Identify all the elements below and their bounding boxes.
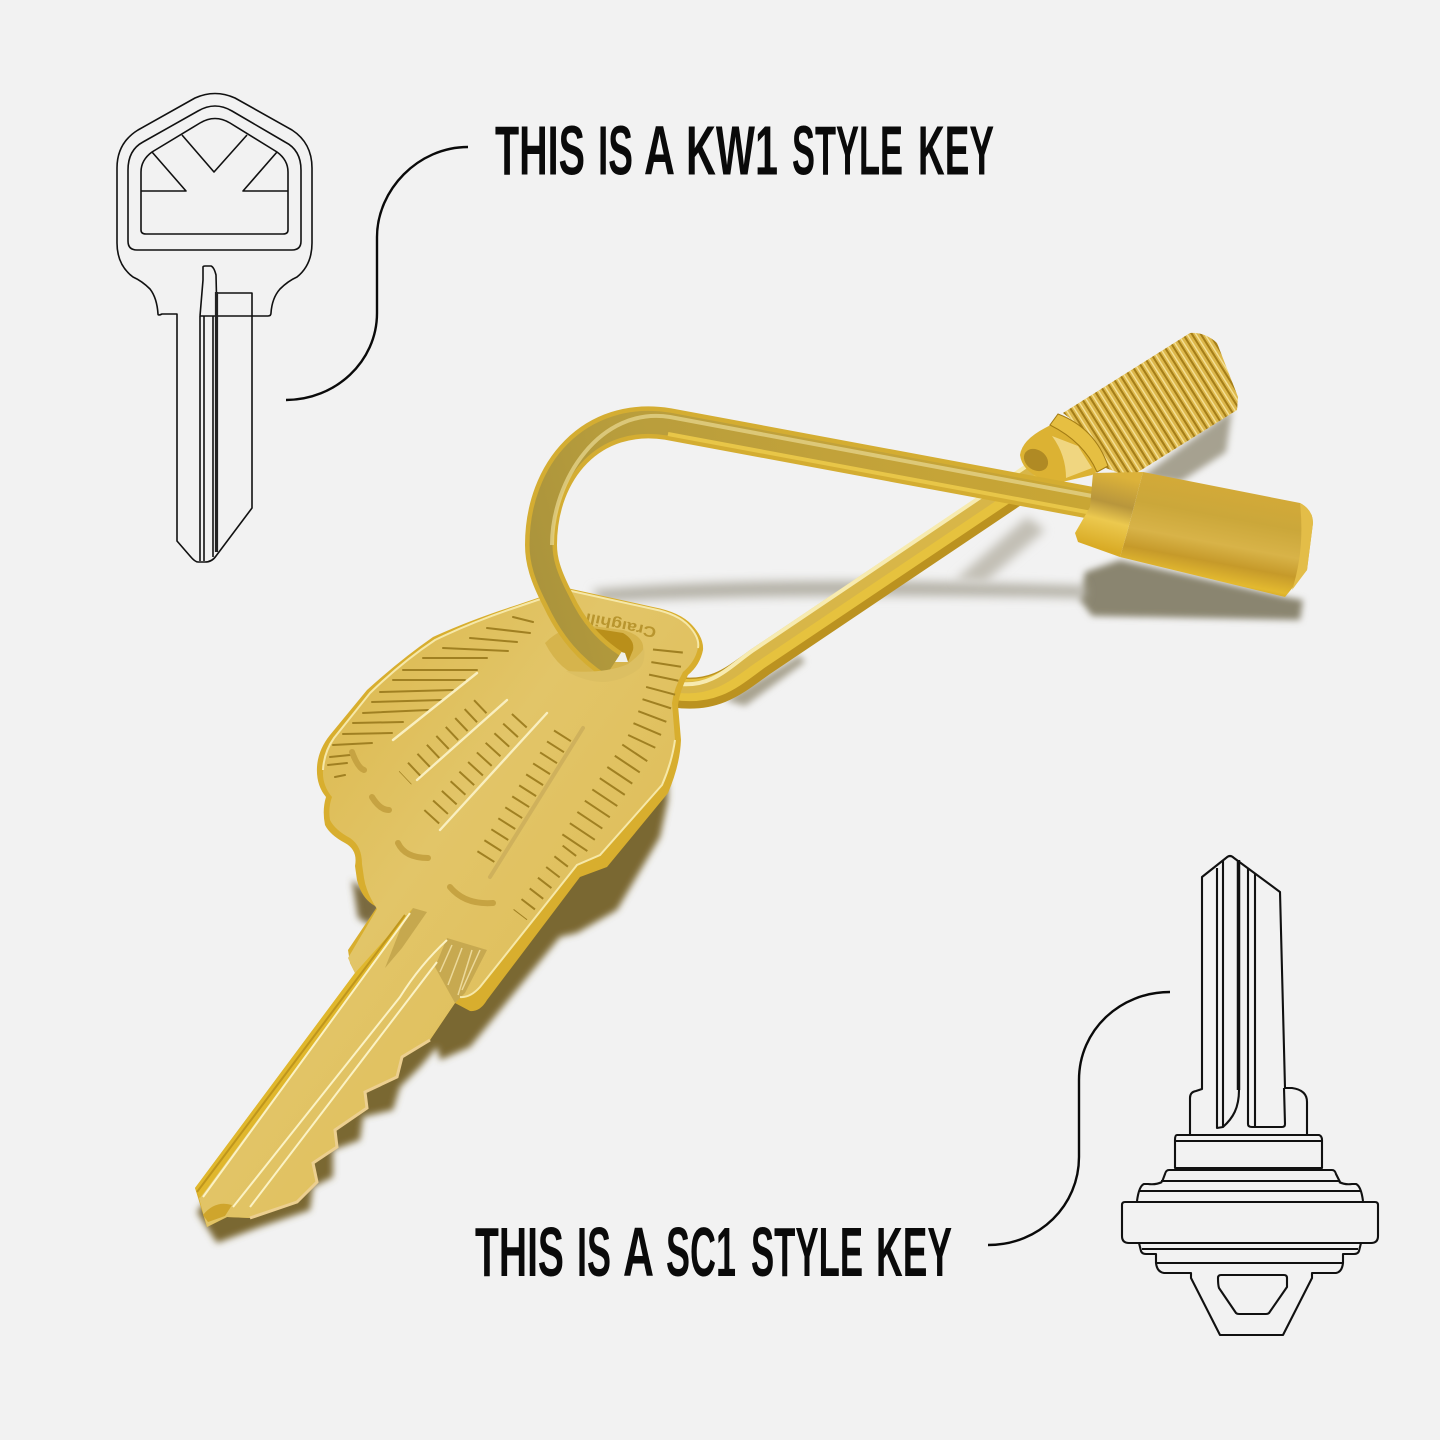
heading: SC1 label: IS [577, 1213, 611, 1291]
heading: KW1 label: STYLE [792, 112, 903, 190]
blade grooves and edges [195, 908, 487, 1222]
knurled cylinder [1063, 333, 1243, 477]
heading: SC1 label [475, 1213, 952, 1291]
key silhouette and rim [195, 588, 703, 1227]
finger ticks [405, 706, 563, 858]
knuckle marks [352, 752, 493, 903]
callout line: SC1 [988, 992, 1170, 1245]
heading: KW1 label [495, 112, 994, 190]
hatching: upper left [328, 617, 533, 777]
brass collar [1075, 472, 1143, 557]
key hole [545, 626, 643, 677]
hatching: right edge ticks [570, 650, 668, 850]
heading: SC1 label: SC1 [666, 1213, 736, 1291]
heading: KW1 label: A [644, 112, 675, 190]
heading: KW1 label: KEY [918, 112, 994, 190]
lower wire of keyring [675, 457, 1050, 693]
heading: KW1 label: THIS [495, 112, 585, 190]
key face including blade [199, 590, 698, 1227]
diagram: KW1 style key line drawing [117, 94, 312, 562]
diagram: SC1 style key line drawing [1122, 856, 1378, 1335]
keyring wire: loop through key hole and straight bar [541, 416, 1092, 665]
cast shadows [197, 410, 1303, 1243]
rim highlight [323, 590, 698, 997]
collar of knurled cylinder [1020, 414, 1108, 482]
lower lip of key hole [566, 648, 644, 682]
photo: brass key and keyring [195, 333, 1313, 1243]
finger lines [393, 673, 547, 830]
heading: SC1 label: THIS [475, 1213, 564, 1291]
heading: SC1 label: A [623, 1213, 654, 1291]
heading: SC1 label: STYLE [751, 1213, 863, 1291]
engraved maker name: Craighill [584, 609, 658, 641]
heading: SC1 label: KEY [876, 1213, 952, 1291]
heading: KW1 label: IS [598, 112, 633, 190]
callout line: KW1 [286, 147, 468, 400]
brass key [195, 588, 703, 1227]
heading: KW1 label: KW1 [686, 112, 778, 190]
smooth brass cylinder [1120, 472, 1313, 597]
